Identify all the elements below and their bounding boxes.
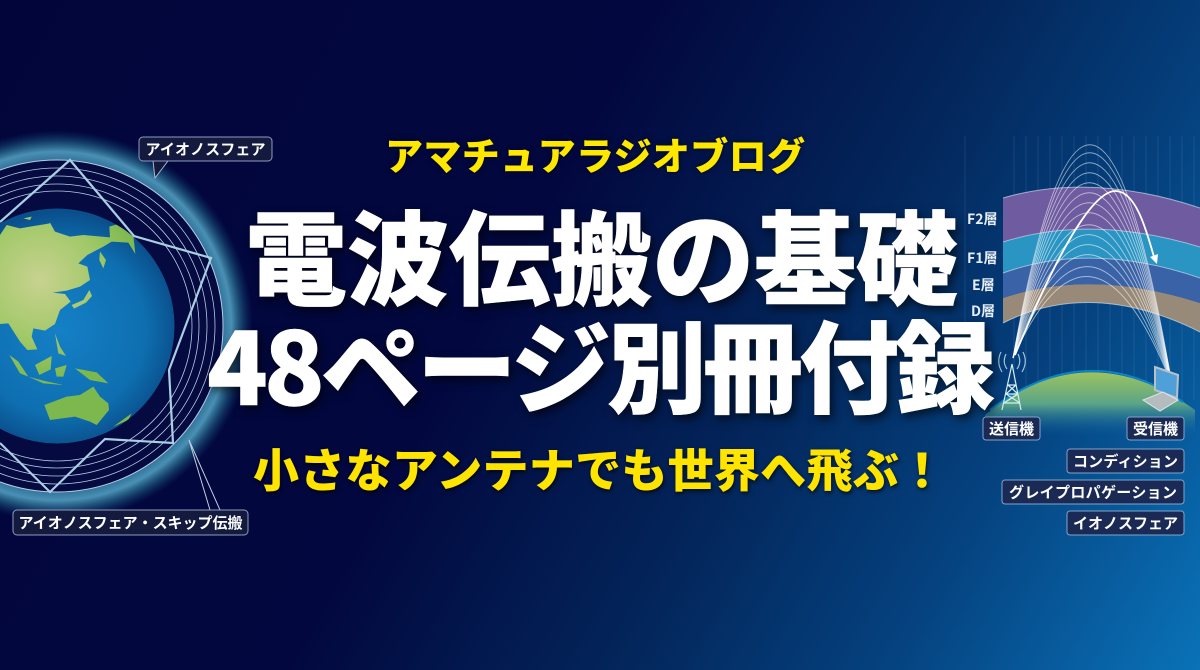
title line 2: 48ページ別冊付録 [207, 289, 995, 434]
title line 1: 電波伝搬の基礎 [245, 180, 958, 327]
layer F1 [1003, 229, 1200, 278]
callout: ionosphere skip propagation [13, 440, 248, 535]
layer D [1003, 284, 1200, 332]
blog name heading: アマチュアラジオブログ [385, 126, 805, 181]
grid lines [965, 136, 1194, 400]
label: ionosphere: イオノスフェア [1073, 512, 1178, 534]
skip propagation path [0, 160, 211, 492]
layer labels [967, 209, 997, 321]
ionosphere rings [0, 160, 223, 492]
diagram: radio propagation layers [965, 136, 1200, 400]
earth [0, 208, 174, 444]
icon: receiver computer [1143, 367, 1178, 411]
layer boundaries [1003, 187, 1200, 332]
layer labels: F2層 [967, 209, 997, 229]
continents [0, 217, 135, 427]
ground [985, 371, 1195, 436]
main ray arrow [1015, 191, 1158, 355]
ionosphere glow [0, 130, 253, 522]
label: gray line propagation: グレイプロパゲーション [1009, 482, 1177, 502]
main title [207, 180, 995, 434]
callout: ionosphere [139, 137, 272, 178]
layer E [1003, 258, 1200, 303]
icon: transmitter tower [999, 352, 1025, 410]
callout: ionosphere skip propagation: アイオノスフェア・スキップ伝搬 [18, 512, 242, 533]
layer F2 [1003, 187, 1200, 247]
label: transmitter: 送信機 [989, 418, 1034, 439]
illustration: ionosphere globe [0, 130, 253, 522]
layer labels: E層 [972, 275, 995, 295]
layer labels: F1層 [967, 248, 997, 268]
subtitle: 小さなアンテナでも世界へ飛ぶ！ [253, 435, 945, 501]
label: condition: コンディション [1073, 450, 1178, 472]
label: receiver: 受信機 [1133, 418, 1178, 439]
callout: ionosphere: アイオノスフェア [146, 138, 266, 160]
radio rays [1013, 145, 1172, 385]
layer labels: D層 [971, 301, 995, 321]
